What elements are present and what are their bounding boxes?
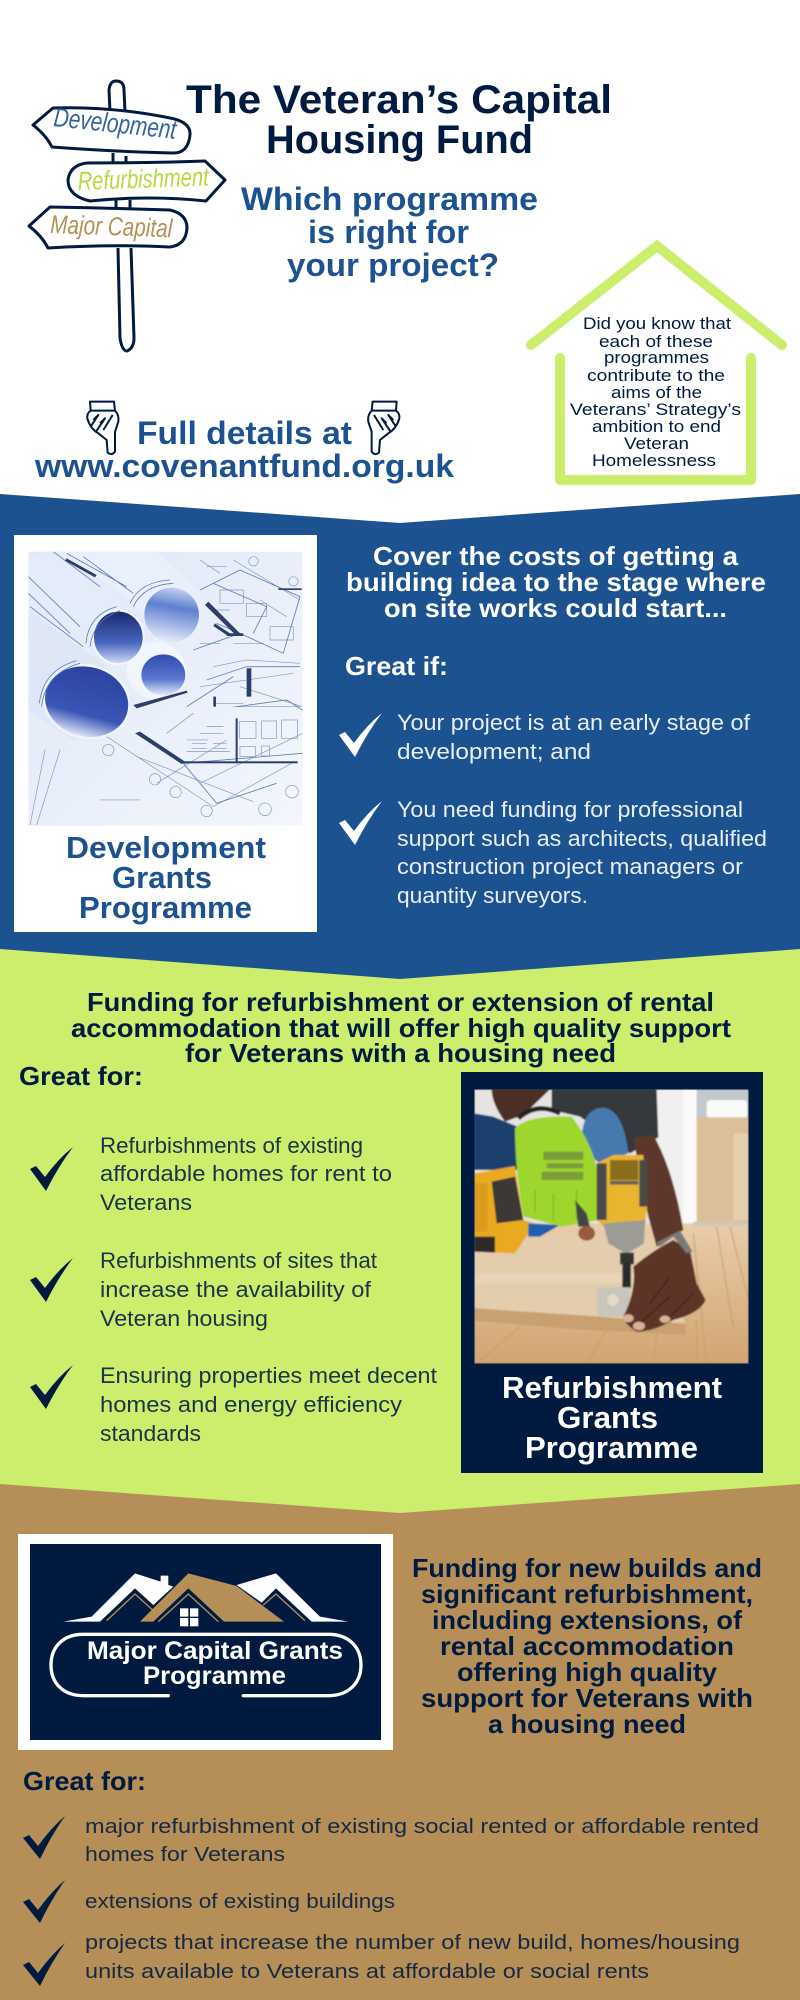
callout: house did you know: each of these bbox=[599, 333, 713, 351]
callout: house did you know: contribute to the bbox=[587, 367, 725, 385]
list: refurbishment criteria: Veteran housing bbox=[100, 1306, 268, 1331]
callout: house did you know: programmes bbox=[604, 349, 709, 367]
list: development criteria: You need funding for professional bbox=[397, 797, 743, 822]
list: refurbishment criteria: Ensuring properties meet decent bbox=[100, 1363, 437, 1388]
icon: signpost bbox=[29, 81, 225, 351]
heading: development description: Cover the costs of getting a bbox=[373, 541, 739, 571]
heading: major capital description: including extensions, of bbox=[432, 1605, 742, 1635]
heading: great for refurbishment: Great for: bbox=[19, 1061, 143, 1091]
panel: major capital section background bbox=[0, 1484, 800, 2000]
heading: refurbishment description bbox=[71, 987, 731, 1068]
list: refurbishment criteria bbox=[30, 1133, 437, 1446]
logo text: Programme bbox=[143, 1662, 286, 1690]
list: development criteria bbox=[339, 710, 767, 908]
list: development criteria: quantity surveyors. bbox=[397, 883, 588, 908]
heading: which programme: your project? bbox=[287, 247, 499, 283]
heading: development description: on site works could start... bbox=[384, 593, 727, 623]
heading: major capital description: significant refurbishment, bbox=[421, 1579, 753, 1609]
logo text: Major Capital Grants bbox=[87, 1637, 343, 1665]
icon: roofs logo bbox=[51, 1573, 361, 1696]
heading: major capital description: Funding for new builds and bbox=[412, 1553, 762, 1583]
heading: major capital description: offering high quality bbox=[457, 1657, 718, 1687]
title: Housing Fund bbox=[266, 118, 533, 162]
icon: pointing hand left bbox=[87, 402, 119, 454]
panel: refurbishment card bbox=[461, 1072, 763, 1473]
callout: house did you know: aims of the bbox=[611, 384, 702, 402]
text: full details link: Full details at bbox=[137, 415, 352, 451]
heading: development description: building idea to the stage where bbox=[346, 567, 766, 597]
title bbox=[186, 78, 612, 162]
text: full details link: www.covenantfund.org.uk bbox=[34, 448, 454, 484]
callout: house did you know: Homelessness bbox=[592, 452, 716, 470]
panel: development section background bbox=[0, 494, 800, 985]
list: major capital criteria: units available to Veterans at affordable or social rents bbox=[85, 1961, 649, 1983]
icon: signpost: Major Capital bbox=[50, 209, 174, 243]
heading: major capital description bbox=[412, 1553, 762, 1739]
heading: major capital description: support for Veterans with bbox=[421, 1683, 753, 1713]
heading: refurbishment description: accommodation that will offer high quality support bbox=[71, 1013, 731, 1043]
heading: major capital description: a housing need bbox=[488, 1709, 686, 1739]
list: major capital criteria bbox=[23, 1816, 759, 1986]
list: refurbishment criteria: Refurbishments of existing bbox=[100, 1133, 363, 1158]
list: major capital criteria: homes for Veterans bbox=[85, 1844, 285, 1866]
card heading bbox=[66, 830, 266, 925]
list: development criteria: support such as architects, qualified bbox=[397, 826, 767, 851]
panel: refurbishment section background bbox=[0, 949, 800, 1520]
list: refurbishment criteria: standards bbox=[100, 1421, 201, 1446]
logo text bbox=[87, 1637, 343, 1690]
list: development criteria: Your project is at an early stage of bbox=[397, 710, 751, 735]
callout: house did you know: Did you know that bbox=[583, 315, 731, 333]
list: refurbishment criteria: homes and energy efficiency bbox=[100, 1392, 402, 1417]
list: refurbishment criteria: Refurbishments of sites that bbox=[100, 1248, 377, 1273]
card heading: Refurbishment bbox=[502, 1370, 722, 1405]
card heading: Programme bbox=[79, 890, 252, 925]
list: refurbishment criteria: increase the availability of bbox=[100, 1277, 372, 1302]
heading: major capital description: rental accommodation bbox=[440, 1631, 734, 1661]
icon: signpost: Refurbishment bbox=[77, 161, 211, 196]
heading: which programme: Which programme bbox=[241, 181, 538, 217]
icon: signpost: Development bbox=[52, 102, 179, 145]
list: development criteria: development; and bbox=[397, 739, 591, 764]
image: blueprints bbox=[28, 552, 303, 826]
card heading: Programme bbox=[525, 1430, 698, 1465]
heading: refurbishment description: for Veterans with a housing need bbox=[185, 1038, 616, 1068]
heading: which programme: is right for bbox=[308, 214, 469, 250]
card heading: Development bbox=[66, 830, 266, 865]
image: drill photo bbox=[474, 1089, 749, 1364]
title: The Veteran’s Capital bbox=[186, 78, 612, 122]
callout: house did you know: ambition to end bbox=[592, 418, 721, 436]
list: refurbishment criteria: Veterans bbox=[100, 1190, 192, 1215]
list: major capital criteria: projects that increase the number of new build, homes/housing bbox=[85, 1932, 740, 1954]
list: refurbishment criteria: affordable homes for rent to bbox=[100, 1161, 392, 1186]
heading: development description bbox=[346, 541, 766, 623]
panel: development card bbox=[14, 535, 317, 932]
callout: house did you know bbox=[531, 246, 782, 480]
heading: great if: Great if: bbox=[345, 651, 448, 681]
list: development criteria: construction project managers or bbox=[397, 854, 743, 879]
card heading: Grants bbox=[112, 860, 212, 895]
icon: pointing hand right bbox=[368, 402, 399, 454]
panel: header background bbox=[0, 0, 800, 530]
list: major capital criteria: major refurbishment of existing social rented or affordable rented bbox=[85, 1816, 759, 1838]
card heading: Grants bbox=[557, 1400, 658, 1435]
callout: house did you know: Veterans’ Strategy’s bbox=[570, 401, 741, 419]
heading: great for major capital: Great for: bbox=[23, 1766, 146, 1796]
card heading bbox=[502, 1370, 722, 1465]
text: full details link bbox=[34, 415, 454, 484]
panel: major capital logo card bbox=[18, 1534, 393, 1750]
callout: house did you know: Veteran bbox=[624, 435, 689, 453]
heading: refurbishment description: Funding for refurbishment or extension of rental bbox=[87, 987, 714, 1017]
heading: which programme bbox=[241, 181, 538, 283]
list: major capital criteria: extensions of existing buildings bbox=[85, 1891, 395, 1913]
